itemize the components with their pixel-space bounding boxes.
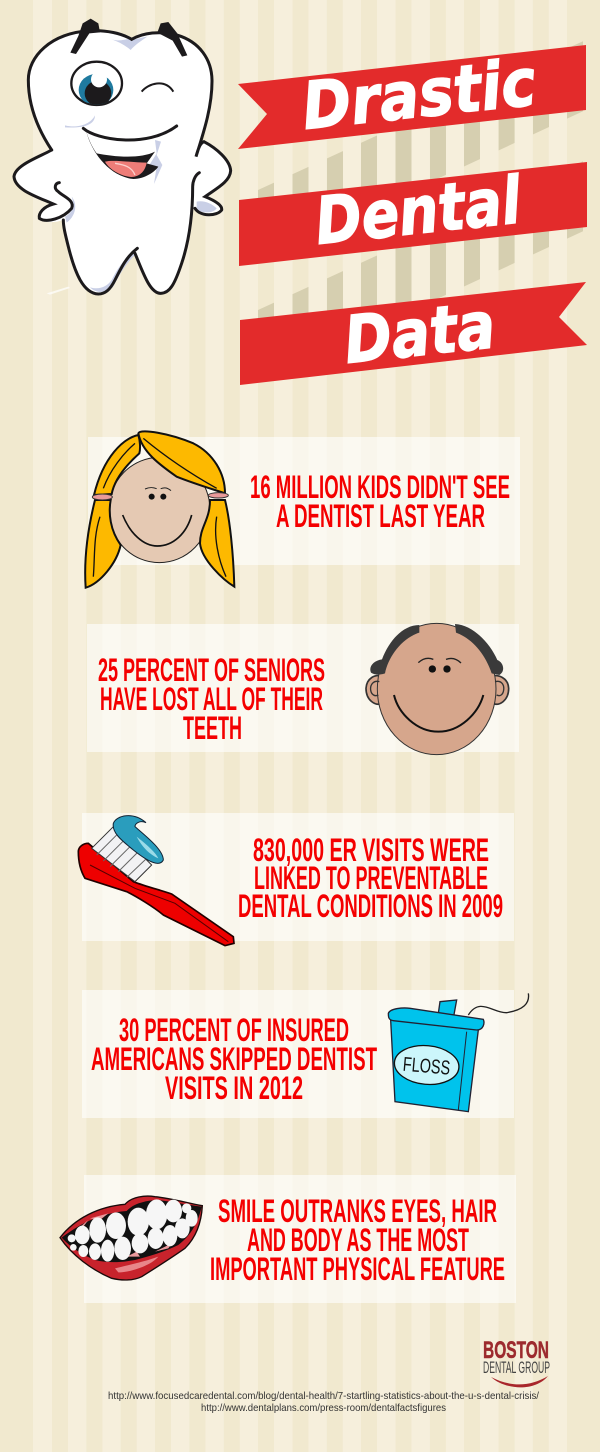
panel: smile statistic	[84, 1175, 516, 1303]
icon: balding man face	[366, 623, 509, 755]
icon: floss box: FLOSS	[402, 1054, 451, 1080]
source links: http://www.dentalplans.com/press-room/dentalfactsfigures	[201, 1402, 446, 1414]
panel: ER visits statistic	[82, 813, 514, 941]
panel: seniors statistic	[87, 624, 519, 752]
source links: http://www.focusedcaredental.com/blog/dental-health/7-startling-statistics-about-the-u-s-dental-crisis/	[108, 1390, 539, 1402]
icon: smiling mouth	[60, 1196, 202, 1280]
banner: Dental	[239, 162, 587, 266]
banner: Drastic: Drastic	[299, 45, 539, 145]
panel: insured statistic: VISITS IN 2012	[165, 1070, 303, 1106]
icon: floss box	[388, 993, 529, 1112]
source links	[108, 1390, 539, 1414]
banner: Data: Data	[341, 288, 499, 379]
panel: seniors statistic: TEETH	[183, 710, 242, 746]
panel: seniors statistic: 25 PERCENT OF SENIORS	[98, 652, 325, 688]
panel: kids statistic	[88, 437, 520, 565]
icon: toothbrush	[78, 816, 234, 946]
banner: Data	[240, 282, 587, 385]
panel: seniors statistic: HAVE LOST ALL OF THEIR	[100, 681, 323, 717]
panel: insured statistic: AMERICANS SKIPPED DENTIST	[91, 1041, 377, 1077]
panel: insured statistic: 30 PERCENT OF INSURED	[119, 1012, 349, 1048]
icon: girl face	[85, 431, 234, 588]
logo: Boston Dental Group: BOSTON	[483, 1337, 549, 1364]
banner: Dental: Dental	[312, 163, 526, 260]
panel: insured statistic	[82, 990, 514, 1118]
logo: Boston Dental Group	[483, 1337, 550, 1387]
tooth mascot	[14, 19, 231, 295]
